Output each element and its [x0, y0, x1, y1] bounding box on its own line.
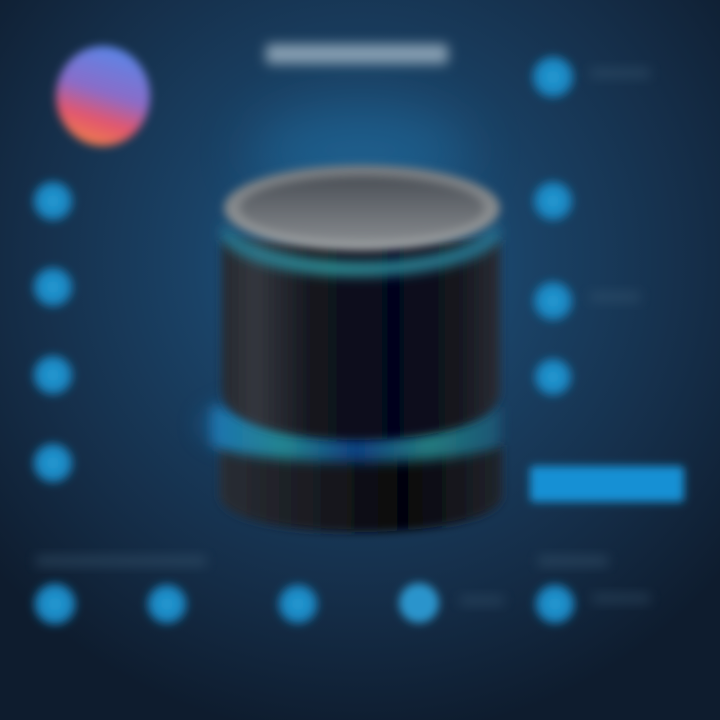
text: bottom right label [592, 594, 650, 603]
icon: bottom dot 2 [147, 584, 187, 624]
teal rim [222, 222, 500, 276]
text: bottom left heading [36, 556, 206, 566]
icon: left dot 2 [33, 267, 73, 307]
speaker bowl [240, 176, 484, 240]
icon: right dot 4 [534, 358, 572, 396]
speaker glow [200, 393, 440, 457]
icon: left dot 1 [33, 181, 73, 221]
speaker body [222, 240, 500, 440]
lower light band [212, 405, 500, 462]
speaker top [224, 165, 500, 251]
glow behind speaker [250, 105, 470, 195]
speaker illustration [200, 165, 502, 532]
icon: bottom dot 1 [34, 583, 76, 625]
icon: bottom dot 5 [535, 584, 575, 624]
title [266, 44, 448, 64]
bottom feature row [34, 556, 650, 625]
icon: left dot 4 [33, 443, 73, 483]
icon: bottom dot 3 [278, 584, 318, 624]
icon: left dot 3 [33, 355, 73, 395]
text: right label 1 [590, 68, 650, 78]
text: right label 3 [590, 292, 640, 302]
button [530, 466, 684, 502]
icon: right dot 2 [533, 181, 573, 221]
text: bottom right heading [538, 556, 608, 566]
icon: right dot 3 [533, 281, 573, 321]
icon: right dot 1 [532, 56, 574, 98]
right feature column [530, 56, 684, 502]
text: bottom label [460, 596, 504, 605]
icon: gradient logo [56, 46, 150, 146]
icon: bottom dot 4 [399, 583, 439, 623]
speaker base [220, 445, 502, 532]
left feature column [33, 181, 73, 483]
